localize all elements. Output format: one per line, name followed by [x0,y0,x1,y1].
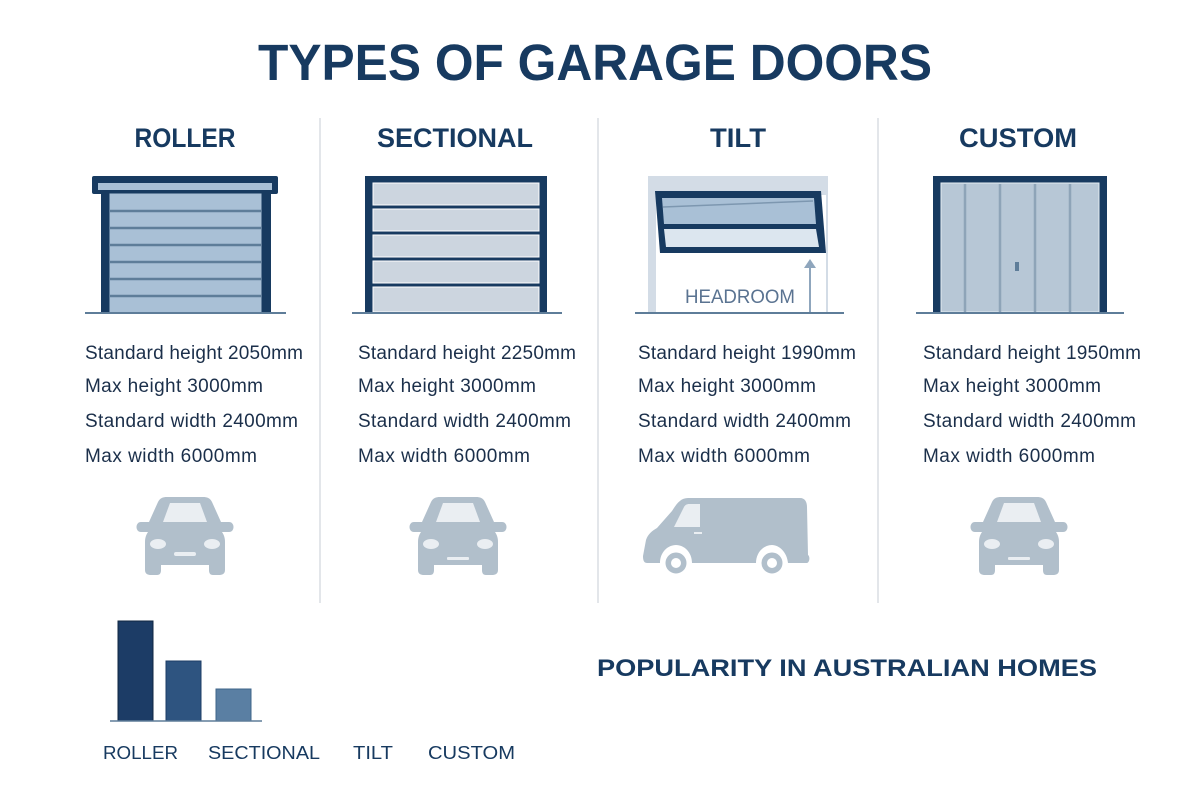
icon: custom door [916,176,1124,313]
label: headroom: HEADROOM [685,287,795,308]
heading: tilt: TILT [710,123,767,153]
specs: sectional: Standard width 2400mm [358,411,571,432]
specs: sectional [358,343,576,467]
icon: car [970,497,1068,575]
heading: sectional: SECTIONAL [377,123,533,153]
specs: custom: Max width 6000mm [923,446,1095,467]
specs: roller: Standard height 2050mm [85,343,303,364]
icon: tilt door [635,176,844,313]
specs: roller: Standard width 2400mm [85,411,298,432]
chart labels [103,743,515,763]
chart labels: TILT [353,743,393,763]
specs: roller: Max width 6000mm [85,446,257,467]
icon: car [410,497,506,575]
chart labels: SECTIONAL [208,743,320,763]
specs: custom: Standard width 2400mm [923,411,1136,432]
chart title: POPULARITY IN AUSTRALIAN HOMES [597,655,1097,682]
panel: custom [916,123,1141,575]
specs: roller: Max height 3000mm [85,376,263,397]
specs: custom: Standard height 1950mm [923,343,1141,364]
specs: tilt: Max width 6000mm [638,446,810,467]
specs: tilt [638,343,856,467]
title: TYPES OF GARAGE DOORS [258,34,932,91]
specs: sectional: Max height 3000mm [358,376,536,397]
specs: sectional: Max width 6000mm [358,446,530,467]
chart labels: ROLLER [103,743,178,763]
specs: roller [85,343,303,467]
icon: sectional door [352,176,562,313]
specs: sectional: Standard height 2250mm [358,343,576,364]
specs: tilt: Standard height 1990mm [638,343,856,364]
specs: tilt: Standard width 2400mm [638,411,851,432]
panel: tilt [635,123,856,575]
chart labels: CUSTOM [428,743,515,763]
heading: roller: ROLLER [134,123,236,153]
icon: van [643,498,809,575]
specs: custom: Max height 3000mm [923,376,1101,397]
panel: roller [85,123,303,575]
icon: roller door [85,176,286,313]
specs: custom [923,343,1141,467]
bar chart [103,621,515,763]
heading: custom: CUSTOM [959,123,1077,153]
arrow: headroom [804,259,816,313]
icon: car [136,497,234,575]
specs: tilt: Max height 3000mm [638,376,816,397]
panel: sectional [352,123,576,575]
